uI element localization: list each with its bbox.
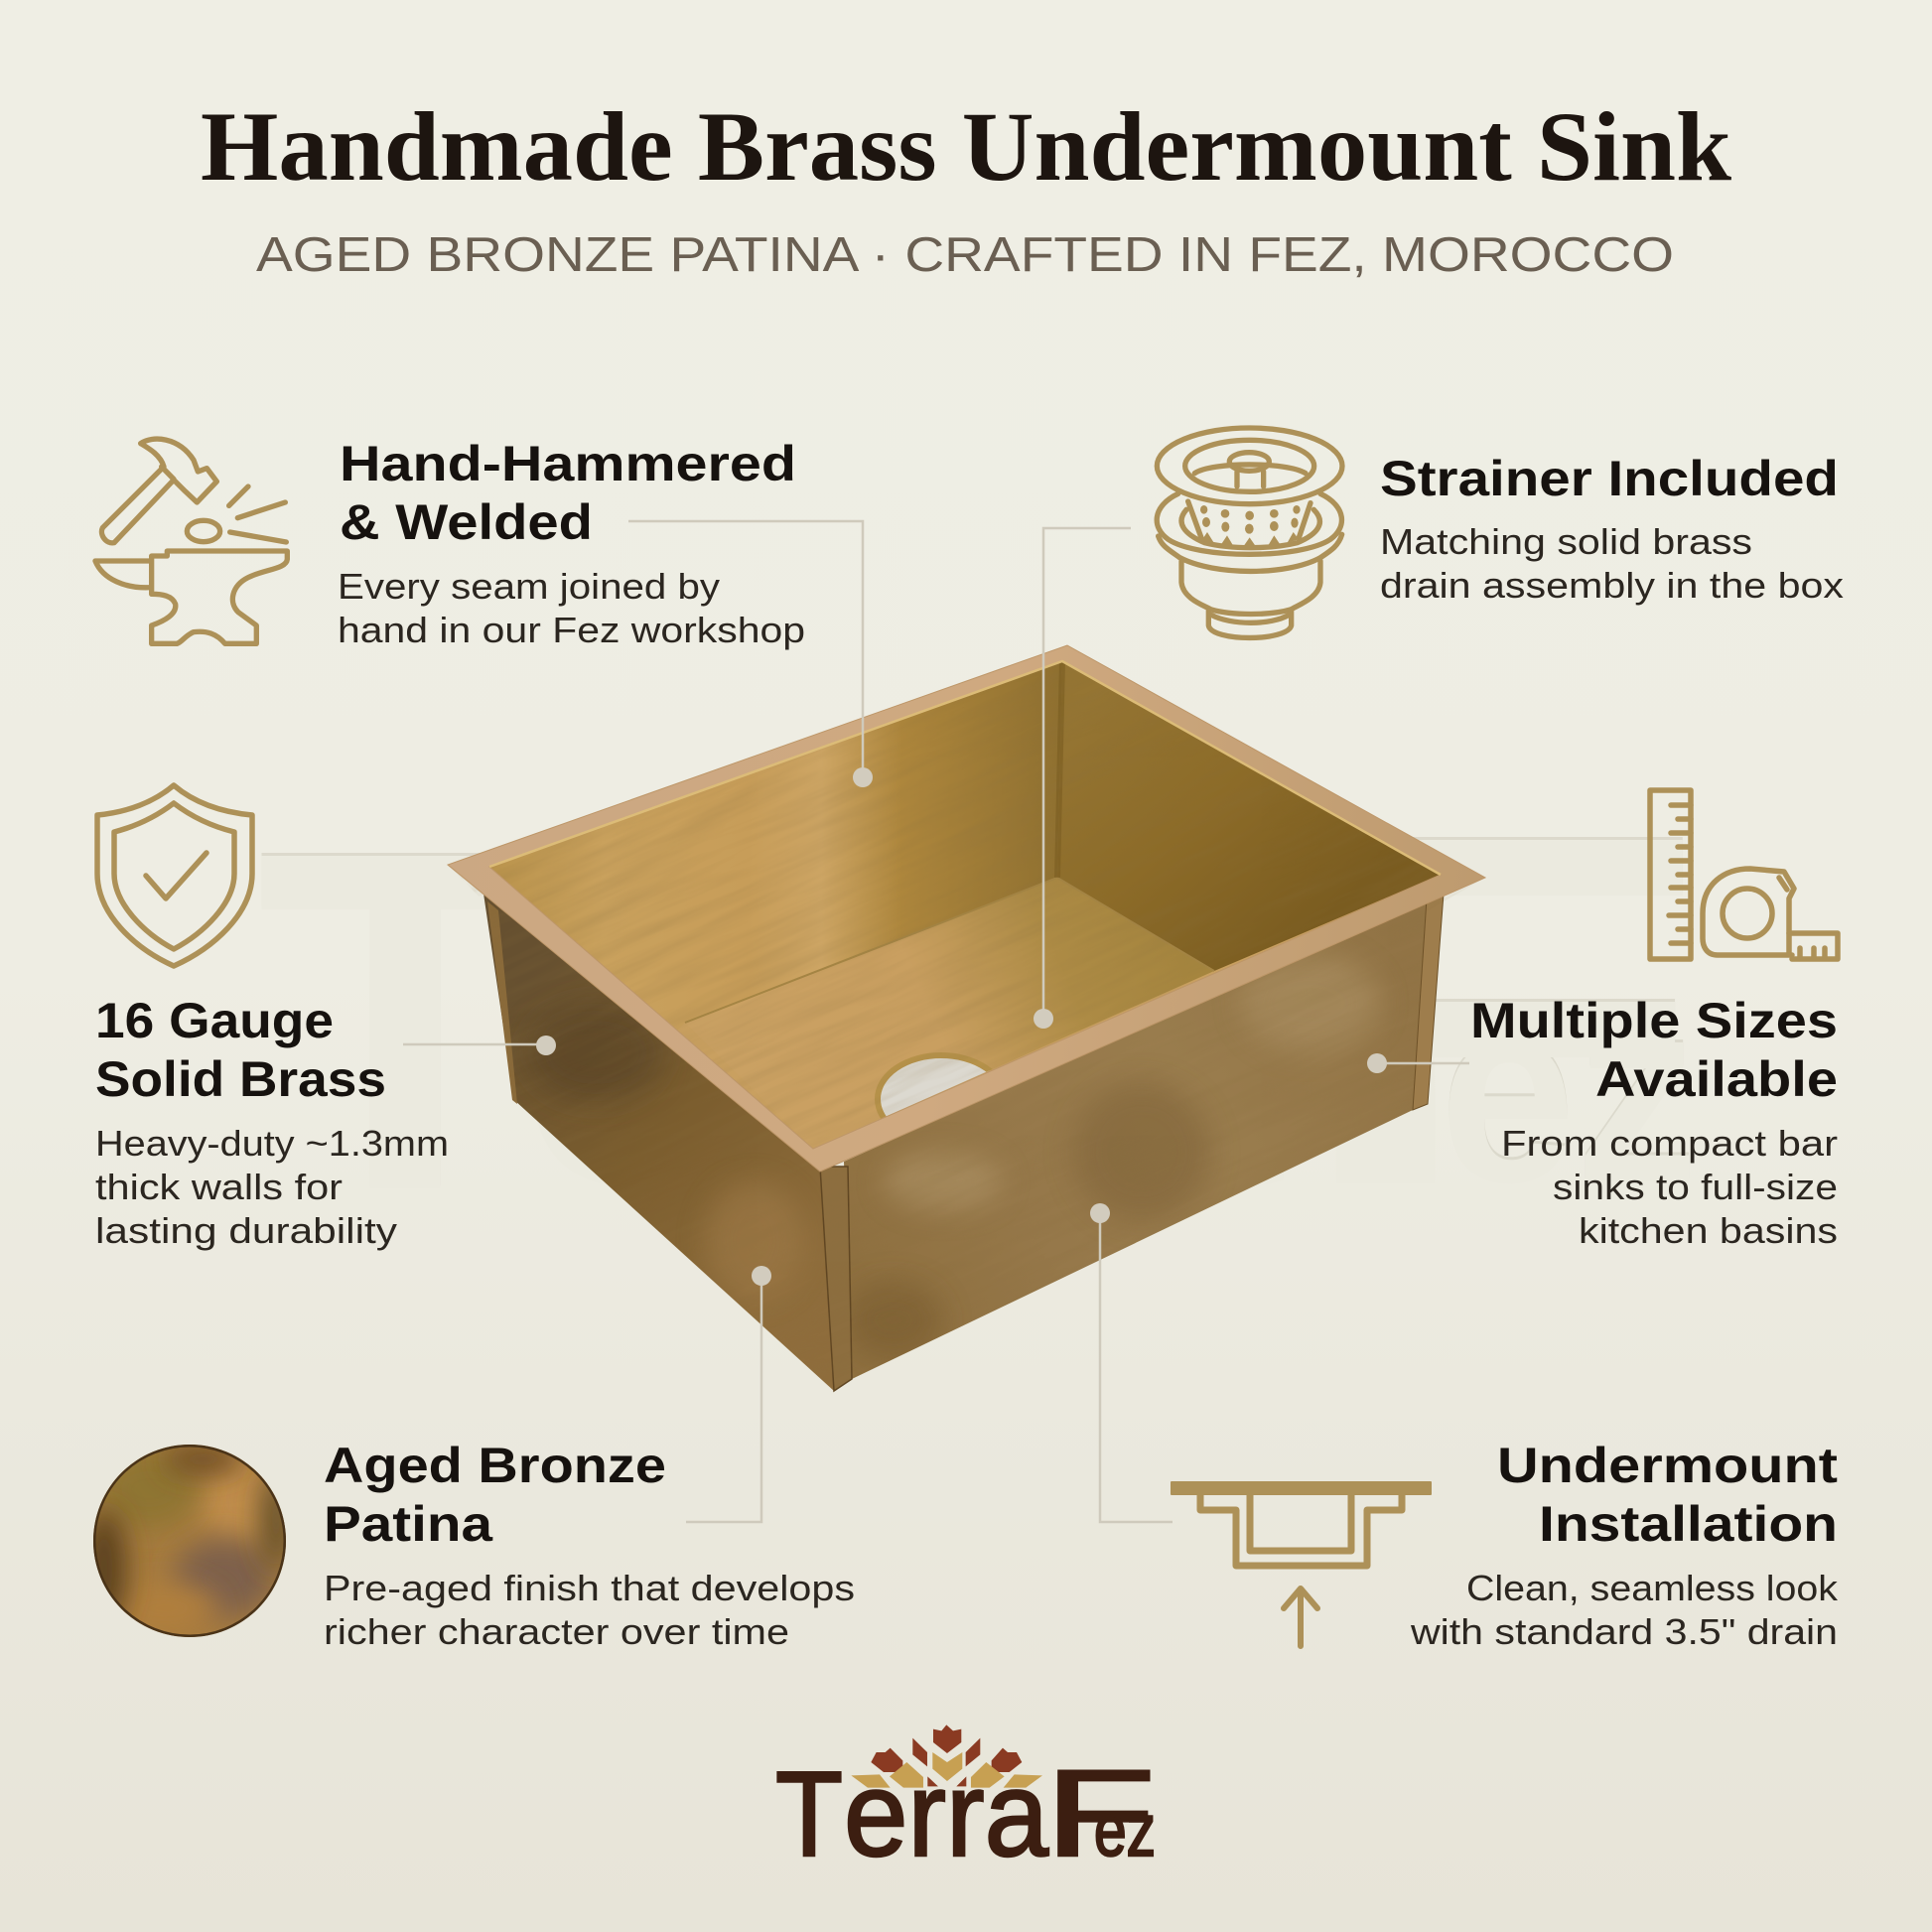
panel: undermount installation [1171, 1438, 1839, 1652]
heading [340, 436, 796, 550]
description: sinks to full-size [1553, 1167, 1838, 1207]
subtitle: AGED BRONZE PATINA · CRAFTED IN FEZ, MOROCCO [256, 228, 1674, 282]
sink interior base [489, 661, 1441, 1149]
heading [324, 1438, 666, 1552]
sink right outer wall [844, 898, 1427, 1379]
heading: 16 Gauge [95, 993, 334, 1048]
description [1501, 1123, 1838, 1251]
description: hand in our Fez workshop [338, 610, 805, 650]
watermark: embossed TerraFez [256, 729, 1708, 1292]
description: lasting durability [95, 1210, 397, 1251]
panel: aged bronze patina [82, 1438, 855, 1652]
description [338, 566, 805, 650]
icon: strainer [1157, 428, 1342, 637]
sink corner seam strip [820, 1167, 852, 1391]
heading [1470, 993, 1838, 1107]
description: richer character over time [324, 1611, 789, 1652]
watermark: embossed TerraFez: ez [1440, 944, 1698, 1238]
brushed metal texture [461, 792, 1466, 1119]
callout: gauge [403, 1035, 556, 1055]
logo: TerraFez [775, 1725, 1156, 1882]
heading: & Welded [340, 494, 593, 550]
interior edge highlight [489, 661, 1441, 875]
sink right interior wall [1057, 661, 1441, 971]
heading: Installation [1539, 1496, 1838, 1552]
description: drain assembly in the box [1380, 565, 1844, 606]
description: Pre-aged finish that develops [324, 1568, 855, 1608]
description: Matching solid brass [1380, 521, 1752, 562]
description [95, 1123, 449, 1251]
logo flower mark [851, 1725, 1042, 1788]
sink floor seam [685, 878, 1214, 1023]
callout lines and dots [403, 521, 1469, 1522]
callout: undermount [1090, 1203, 1173, 1522]
callout: strainer [1034, 528, 1131, 1029]
title: Handmade Brass Undermount Sink [201, 91, 1731, 202]
product: brass sink [447, 645, 1486, 1392]
logo wordmark [775, 1745, 1156, 1882]
icon: shield with check [97, 785, 252, 966]
panel: multiple sizes available [1470, 790, 1838, 1251]
sink corner seam [1057, 661, 1062, 878]
callout: sizes [1367, 1053, 1469, 1073]
heading: Undermount [1497, 1438, 1838, 1493]
heading: Available [1595, 1051, 1838, 1107]
heading [1497, 1438, 1838, 1552]
heading: Multiple Sizes [1470, 993, 1838, 1048]
description: kitchen basins [1579, 1210, 1838, 1251]
logo wordmark: ez [1094, 1789, 1156, 1871]
sink right flange [1413, 894, 1444, 1110]
sink left flange [487, 901, 517, 1104]
watermark: embossed TerraFez: F [1291, 732, 1708, 1290]
sink drain [875, 1052, 993, 1118]
heading: Strainer Included [1380, 451, 1839, 506]
sink floor [685, 878, 1214, 1149]
watermark: embossed TerraFez: T [256, 752, 554, 1292]
description: thick walls for [95, 1167, 343, 1207]
icon: ruler and tape measure [1650, 790, 1838, 959]
watermark: embossed TerraFez: ez [1440, 941, 1698, 1235]
description [1410, 1568, 1839, 1652]
logo wordmark: erra [844, 1746, 1048, 1881]
logo wordmark: T [775, 1746, 843, 1881]
sink left wall patina [526, 1003, 804, 1301]
logo wordmark: F [1044, 1745, 1156, 1882]
heading: Hand-Hammered [340, 436, 796, 491]
icon: hammer and anvil [95, 439, 287, 643]
sink rim [448, 645, 1485, 1172]
sink right wall patina [844, 953, 1380, 1360]
icon: undermount diagram [1171, 1481, 1432, 1646]
watermark: embossed TerraFez: T [256, 749, 554, 1289]
watermark: embossed TerraFez: erra [516, 821, 1284, 1265]
panel: 16 gauge solid brass [95, 785, 449, 1251]
heading: Solid Brass [95, 1051, 386, 1107]
callout: hand-hammered [628, 521, 873, 787]
description: Clean, seamless look [1466, 1568, 1839, 1608]
sink back interior wall [489, 661, 1062, 1033]
watermark: embossed TerraFez: erra [516, 824, 1284, 1268]
description [324, 1568, 855, 1652]
description: From compact bar [1501, 1123, 1838, 1164]
panel: strainer included [1157, 428, 1844, 637]
description: with standard 3.5" drain [1410, 1611, 1838, 1652]
swatch: patina disc [93, 1445, 286, 1637]
heading: Aged Bronze [324, 1438, 666, 1493]
callout: patina [686, 1266, 771, 1522]
description: Heavy-duty ~1.3mm [95, 1123, 449, 1164]
panel: hand-hammered and welded [95, 436, 805, 650]
heading [95, 993, 386, 1107]
description [1380, 521, 1844, 606]
watermark: embossed TerraFez: F [1291, 729, 1708, 1287]
heading: Patina [324, 1496, 493, 1552]
description: Every seam joined by [338, 566, 720, 607]
sink left outer wall [483, 894, 834, 1391]
